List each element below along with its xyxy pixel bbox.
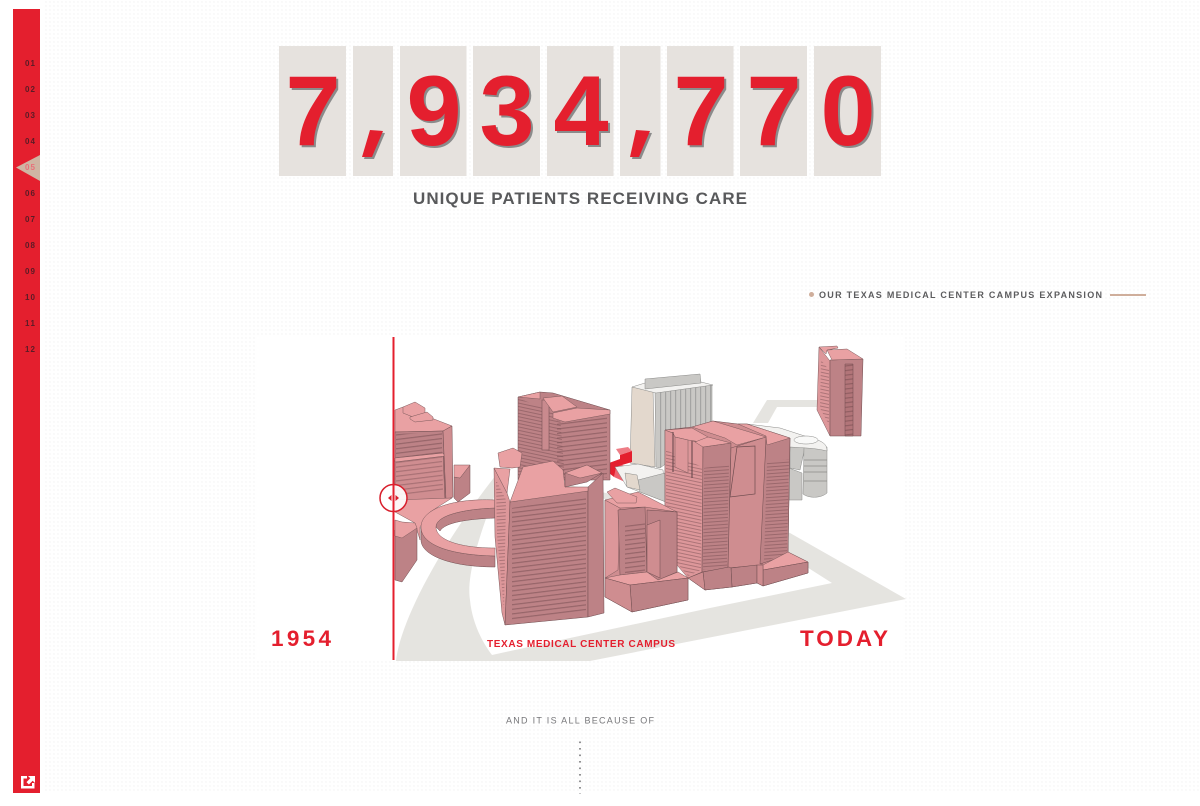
campus comparison panel [255, 335, 906, 661]
circular walkway [421, 500, 495, 567]
counter: 7,934,770: 0 [822, 57, 878, 168]
section numbers [25, 59, 36, 354]
section numbers: 04 [25, 137, 36, 146]
tower: top right [817, 346, 863, 436]
slider handle [380, 337, 407, 660]
counter: 7,934,770: 4 [553, 55, 609, 166]
tower: left, partly revealed [395, 402, 470, 582]
curved building [747, 424, 827, 500]
active section marker [16, 155, 40, 181]
counter: 7,934,770 [279, 46, 881, 176]
label: today: TODAY [800, 626, 888, 651]
counter: 7,934,770: 3 [479, 55, 535, 166]
counter: 7,934,770: 3 [481, 57, 537, 168]
subtitle: UNIQUE PATIENTS RECEIVING CARE [413, 189, 747, 208]
section numbers: 09 [25, 267, 36, 276]
counter: 7,934,770: , [627, 91, 669, 156]
white tower [630, 374, 713, 468]
counter: 7,934,770: 9 [408, 57, 464, 168]
ground paths [396, 400, 906, 661]
counter: 7,934,770: 9 [406, 55, 462, 166]
tower: front large [494, 448, 604, 625]
section numbers: 06 [25, 189, 36, 198]
counter: 7,934,770: 0 [820, 55, 876, 166]
counter: 7,934,770: 7 [673, 55, 729, 166]
section numbers: 07 [25, 215, 36, 224]
counter: 7,934,770: 4 [555, 57, 611, 168]
section numbers: 05 [25, 163, 36, 172]
section numbers: 01 [25, 59, 36, 68]
label: campus: TEXAS MEDICAL CENTER CAMPUS [487, 639, 675, 650]
closing text: AND IT IS ALL BECAUSE OF [506, 716, 654, 726]
counter: 7,934,770: 7 [746, 55, 802, 166]
tower: front middle [605, 488, 688, 612]
section numbers: 02 [25, 85, 36, 94]
section numbers: 03 [25, 111, 36, 120]
section numbers: 10 [25, 293, 36, 302]
red and white low blocks [609, 447, 666, 502]
counter: 7,934,770: , [360, 91, 402, 156]
section label: campus expansion: OUR TEXAS MEDICAL CENTER CAMPUS EXPANSION [819, 290, 1102, 300]
section numbers: 11 [25, 319, 36, 328]
tower: front right large [665, 421, 808, 590]
sidebar navigation [13, 9, 40, 793]
section numbers: 12 [25, 345, 36, 354]
counter: 7,934,770: 7 [748, 57, 804, 168]
label: 1954: 1954 [271, 626, 331, 651]
dotted connector [579, 742, 581, 794]
counter: 7,934,770: 7 [285, 55, 341, 166]
counter: 7,934,770: 7 [675, 57, 731, 168]
icon: external link [21, 776, 35, 788]
tower: rear centre [518, 392, 610, 480]
section numbers: 08 [25, 241, 36, 250]
counter: 7,934,770: 7 [287, 57, 343, 168]
